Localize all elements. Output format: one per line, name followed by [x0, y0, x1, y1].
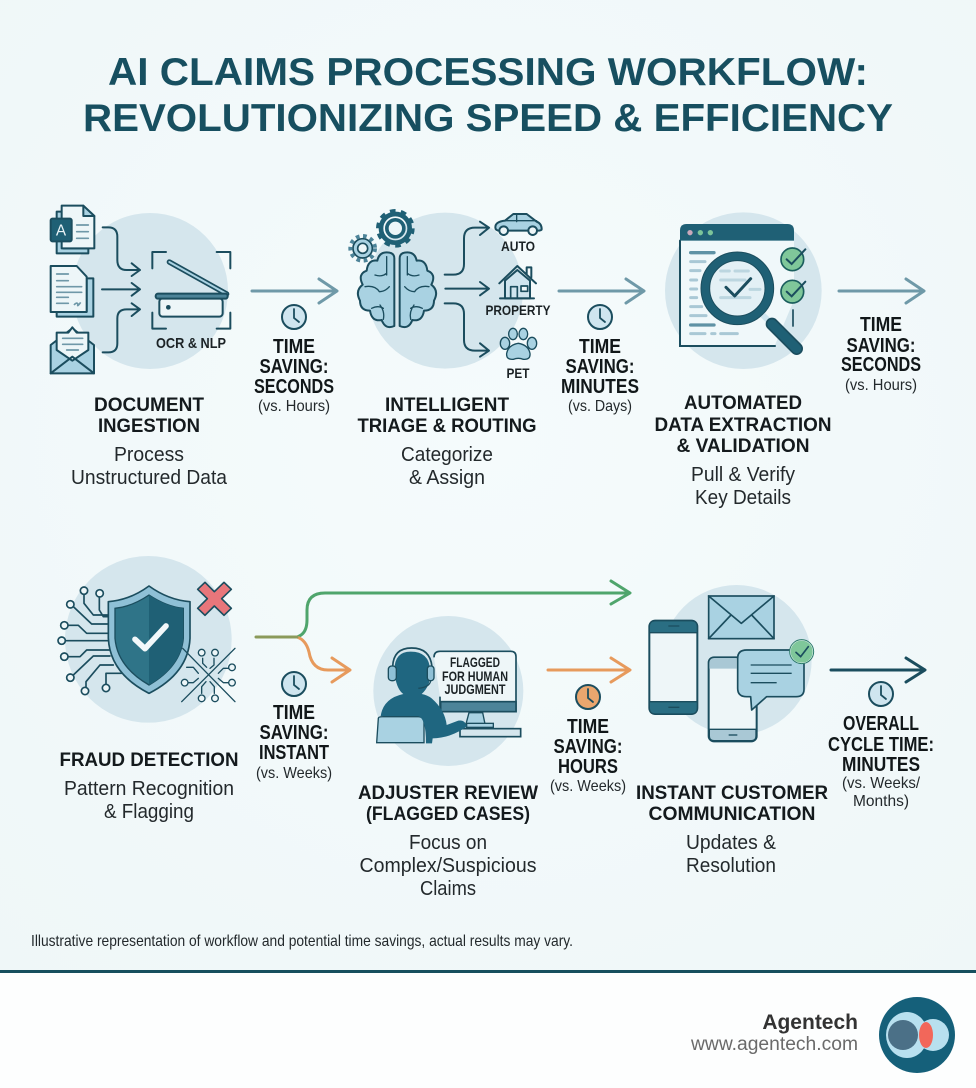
arrow: orange to customer communication with time saving: [548, 658, 630, 795]
arrow: overall cycle time: Months): [853, 793, 909, 810]
arrow: step 3 onward with time saving: SAVING:: [846, 335, 916, 357]
heading: extraction: & VALIDATION: [676, 435, 810, 457]
description: triage: [401, 444, 493, 489]
panel: document ingestion: [51, 206, 230, 489]
arrow: step 1 to 2 with time saving: [252, 279, 337, 415]
heading: adjuster review: [358, 782, 539, 825]
time saving: instant: INSTANT: [259, 742, 329, 764]
monitor text: flagged for human judgment: FLAGGED: [450, 654, 500, 670]
heading: triage: TRIAGE & ROUTING: [358, 415, 536, 437]
description: adjuster review: Complex/Suspicious: [360, 855, 536, 877]
description: adjuster review: Claims: [420, 878, 476, 900]
logo: [879, 997, 955, 1073]
title: AI CLAIMS PROCESSING WORKFLOW:: [108, 51, 868, 94]
description: customer communication: Resolution: [686, 855, 776, 877]
time saving: instant: TIME: [273, 702, 315, 724]
heading: customer communication: INSTANT CUSTOMER: [636, 782, 828, 804]
arrow: step 2 to 3 with time saving: TIME: [579, 336, 621, 358]
arrow: step 2 to 3 with time saving: (vs. Days): [568, 398, 632, 415]
arrow: orange to customer communication with time saving: SAVING:: [554, 736, 622, 758]
monitor text: flagged for human judgment: JUDGMENT: [444, 681, 506, 697]
description: triage: & Assign: [409, 467, 485, 489]
icon: document scanner: [51, 206, 230, 373]
time saving: instant: SAVING:: [260, 722, 328, 744]
arrow: step 1 to 2 with time saving: SECONDS: [254, 376, 334, 398]
footer divider: [0, 970, 976, 973]
heading: customer communication: [636, 782, 828, 825]
description: fraud detection: & Flagging: [104, 801, 194, 823]
panel: intelligent triage and routing: [350, 212, 551, 489]
arrow: step 2 to 3 with time saving: [559, 279, 644, 415]
icon: document under magnifier: [665, 212, 822, 369]
footer brand: www.agentech.com: [690, 1034, 858, 1055]
arrow: step 1 to 2 with time saving: SAVING:: [260, 356, 328, 378]
arrow: step 1 to 2 with time saving: TIME: [273, 336, 315, 358]
arrow: orange to customer communication with time saving: TIME: [567, 716, 609, 738]
panel: automated data extraction: [654, 212, 832, 509]
heading: document ingestion: DOCUMENT: [94, 394, 204, 416]
arrow: green bypass to customer communication: [297, 581, 630, 637]
heading: triage: [358, 394, 536, 437]
time saving: instant: (vs. Weeks): [256, 765, 332, 782]
arrow: overall cycle time: [828, 658, 934, 810]
icon: document scanner: A: [56, 223, 67, 240]
title: [83, 51, 893, 140]
arrow: orange to customer communication with time saving: HOURS: [558, 756, 618, 778]
label: auto: AUTO: [501, 238, 535, 254]
description: fraud detection: [64, 778, 234, 823]
heading: fraud detection: FRAUD DETECTION: [60, 749, 238, 771]
heading: extraction: DATA EXTRACTION: [654, 414, 832, 436]
heading: document ingestion: [94, 394, 204, 437]
description: document ingestion: Unstructured Data: [71, 467, 228, 489]
title: REVOLUTIONIZING SPEED & EFFICIENCY: [83, 97, 893, 140]
arrow: step 2 to 3 with time saving: MINUTES: [561, 376, 639, 398]
description: customer communication: Updates &: [686, 832, 777, 854]
label: OCR & NLP: OCR & NLP: [156, 335, 226, 352]
heading: adjuster review: ADJUSTER REVIEW: [358, 782, 539, 804]
arrow: step 1 to 2 with time saving: (vs. Hours): [258, 398, 330, 415]
description: fraud detection: Pattern Recognition: [64, 778, 234, 800]
arrow: overall cycle time: OVERALL: [843, 713, 919, 735]
arrow: step 3 onward with time saving: [839, 279, 924, 394]
description: document ingestion: Process: [114, 444, 184, 466]
description: document ingestion: [71, 444, 228, 489]
arrow: orange to customer communication with time saving: (vs. Weeks): [550, 778, 626, 795]
description: extraction: Pull & Verify: [691, 464, 795, 486]
time saving: instant: [256, 672, 332, 782]
heading: document ingestion: INGESTION: [98, 415, 200, 437]
heading: adjuster review: (FLAGGED CASES): [366, 803, 530, 825]
icon: phones, envelope and chat: [649, 585, 814, 741]
arrow: step 2 to 3 with time saving: SAVING:: [566, 356, 634, 378]
heading: triage: INTELLIGENT: [385, 394, 509, 416]
arrow: orange branch to adjuster review: [256, 637, 350, 682]
heading: customer communication: COMMUNICATION: [648, 803, 816, 825]
arrow: step 3 onward with time saving: TIME: [860, 314, 902, 336]
footer brand: [690, 1011, 858, 1055]
heading: extraction: AUTOMATED: [684, 392, 802, 414]
arrow: overall cycle time: (vs. Weeks/: [842, 775, 921, 792]
monitor text: flagged for human judgment: [442, 654, 508, 697]
icon: shield with circuits: [58, 556, 235, 723]
description: adjuster review: Focus on: [409, 832, 487, 854]
arrow: overall cycle time: MINUTES: [842, 754, 920, 776]
icon: adjuster at monitor: [373, 616, 523, 766]
description: adjuster review: [360, 832, 536, 900]
description: extraction: [691, 464, 795, 509]
panel: adjuster review: [358, 616, 539, 900]
heading: extraction: [654, 392, 832, 457]
arrow: step 3 onward with time saving: SECONDS: [841, 354, 921, 376]
footer brand: Agentech: [762, 1011, 858, 1034]
label: pet: PET: [506, 365, 530, 381]
label: property: PROPERTY: [486, 302, 551, 318]
monitor text: flagged for human judgment: FOR HUMAN: [442, 668, 508, 684]
description: extraction: Key Details: [695, 487, 791, 509]
description: customer communication: [686, 832, 777, 877]
description: triage: Categorize: [401, 444, 493, 466]
arrow: step 3 onward with time saving: (vs. Hours): [845, 377, 917, 394]
panel: fraud detection: [58, 556, 238, 823]
arrow: overall cycle time: CYCLE TIME:: [828, 734, 934, 756]
icon: brain with gears and routes: [350, 212, 542, 369]
panel: instant customer communication: [636, 585, 828, 877]
footnote: Illustrative representation of workflow and potential time savings, actual results may vary.: [31, 933, 573, 950]
